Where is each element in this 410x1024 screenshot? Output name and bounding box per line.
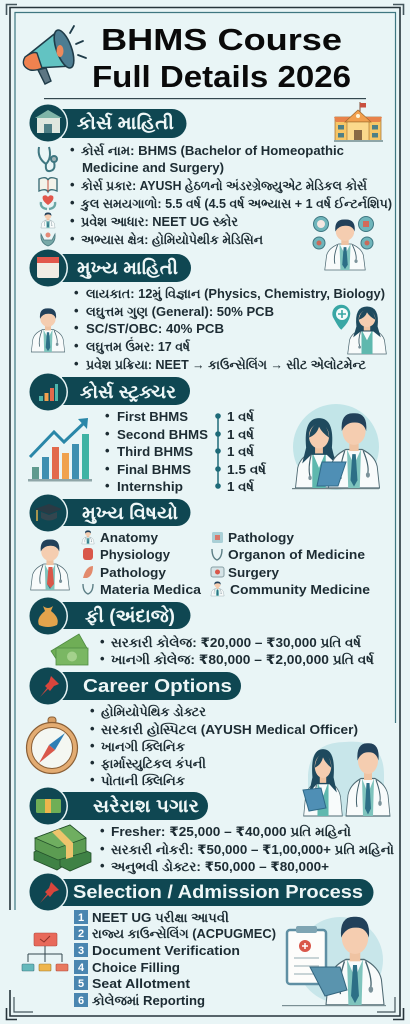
numbered steps: 5	[78, 978, 84, 990]
bullet list: course information: •	[70, 195, 75, 210]
list: course years: •	[105, 478, 110, 493]
bullet list: career options: •	[90, 738, 95, 753]
bullet list: course information: •	[70, 142, 75, 157]
icons: subject column two	[211, 532, 224, 596]
bullet list: career options: હોમિયોપેથિક ડોક્ટર	[101, 703, 206, 719]
list: subjects column two: Organon of Medicine	[228, 547, 365, 562]
list: subjects column two: Community Medicine	[230, 582, 370, 597]
heading: fees	[28, 596, 190, 636]
bullet list: career options: ખાનગી ક્લિનિક	[101, 738, 186, 754]
numbered steps: કોલેજમાં Reporting	[92, 992, 205, 1008]
list: course years: •	[105, 461, 110, 476]
timeline: durations	[215, 408, 267, 494]
heading: admission process: Selection / Admission Process	[73, 882, 363, 902]
bullet list: course information: •	[70, 213, 75, 228]
bullet list: career options	[90, 703, 358, 788]
title	[92, 22, 351, 94]
timeline: durations: 1 વર્ષ	[227, 408, 255, 424]
bullet list: fees: ખાનગી કોલેજ: ₹80,000 – ₹2,00,000 પ્રતિ વર્ષ	[111, 651, 375, 667]
list: subjects column one: Anatomy	[100, 530, 159, 545]
illustration: two doctors	[303, 742, 390, 816]
heading: key information: મુખ્ય માહિતી	[77, 257, 178, 279]
bullet list: salary: સરકારી નોકરી: ₹50,000 – ₹1,00,000+ પ્રતિ મહિનો	[111, 841, 394, 857]
bullet list: key information: •	[74, 338, 79, 353]
bullet list: key information: પ્રવેશ પ્રક્રિયા: NEET → કાઉન્સેલિંગ → સીટ એલોટમેન્ટ	[86, 356, 366, 372]
numbered steps	[74, 909, 276, 1008]
bullet list: key information: •	[74, 356, 79, 371]
section: career options	[26, 666, 390, 816]
title: Full Details 2026	[92, 59, 351, 94]
bullet list: course information: •	[70, 231, 75, 246]
bullet list: career options: પોતાની ક્લિનિક	[101, 772, 186, 788]
list: course years: Final BHMS	[117, 462, 191, 477]
list: course years: •	[105, 426, 110, 441]
bullet list: course information: અભ્યાસ ક્ષેત્ર: હોમિયોપેથીક મેડિસિન	[81, 231, 263, 247]
bullet list: key information: લઘુત્તમ ગુણ (General): 50% PCB	[86, 304, 274, 320]
section: key information	[28, 248, 386, 372]
list: subjects column one: Physiology	[100, 547, 171, 562]
list: course years: •	[105, 408, 110, 423]
bullet list: fees: •	[100, 651, 105, 666]
heading: career options	[28, 666, 241, 706]
list: course years: Second BHMS	[117, 427, 208, 442]
illustration: doctor with medical bubbles	[313, 216, 374, 270]
numbered steps: Document Verification	[92, 943, 240, 958]
numbered steps: 3	[78, 945, 84, 957]
timeline: durations: 1.5 વર્ષ	[227, 461, 267, 477]
bullet list: key information: •	[74, 320, 79, 335]
title: BHMS Course	[101, 22, 342, 57]
bullet list: fees: સરકારી કોલેજ: ₹20,000 – ₹30,000 પ્રતિ વર્ષ	[111, 634, 362, 650]
bullet list: career options: •	[90, 772, 95, 787]
icon: college building	[334, 102, 383, 142]
list: subjects column one: Materia Medica	[100, 582, 202, 597]
section: course information	[28, 102, 392, 270]
section: main subjects	[28, 493, 370, 597]
bullet list: fees	[100, 634, 375, 667]
list: course years: First BHMS	[117, 409, 188, 424]
heading: key information	[28, 248, 191, 288]
heading: main subjects: મુખ્ય વિષયો	[82, 502, 179, 524]
bullet list: career options: ફાર્માસ્યુટિકલ કંપની	[101, 755, 206, 772]
list: course years	[105, 408, 208, 494]
numbered steps: 4	[78, 962, 85, 974]
heading: course information	[28, 103, 186, 143]
list: subjects column two: Surgery	[228, 565, 280, 580]
heading: average salary: સરેરાશ પગાર	[93, 795, 200, 816]
icon: flow chart	[22, 933, 68, 971]
icons: subject column one	[82, 530, 94, 594]
bullet list: key information: •	[74, 285, 79, 300]
icon: megaphone	[23, 26, 86, 84]
numbered steps: Choice Filling	[92, 960, 180, 975]
bullet list: fees: •	[100, 634, 105, 649]
section: course structure	[28, 372, 380, 494]
section: average salary	[28, 786, 394, 875]
list: course years: Third BHMS	[117, 444, 193, 459]
bullet list: course information: કોર્સ પ્રકાર: AYUSH હેઠળનો અંડરગ્રેજ્યુએટ મેડિકલ કોર્સ	[81, 177, 368, 194]
bullet list: key information: SC/ST/OBC: 40% PCB	[86, 321, 224, 336]
list: subjects column two	[228, 530, 370, 597]
chart: growth bars with arrow	[28, 418, 92, 482]
heading: average salary	[28, 786, 208, 826]
numbered steps: 2	[78, 928, 84, 940]
heading: course structure: કોર્સ સ્ટ્રક્ચર	[80, 381, 177, 403]
heading: course structure	[28, 372, 190, 412]
bullet list: course information: કોર્સ નામ: BHMS (Bachelor of Homeopathic	[81, 142, 344, 158]
illustration: male doctor	[31, 308, 65, 352]
bullet list: course information	[70, 142, 392, 247]
bullet list: key information	[74, 285, 385, 372]
icon: compass	[26, 717, 78, 774]
bullet list: career options: •	[90, 755, 95, 770]
illustration: doctor with red tie	[31, 540, 69, 590]
bullet list: course information: પ્રવેશ આધાર: NEET UG સ્કોર	[81, 213, 238, 229]
illustration: two doctors with clipboard	[292, 404, 380, 490]
bullet list: salary: અનુભવી ડોક્ટર: ₹50,000 – ₹80,000+	[111, 858, 329, 875]
bullet list: salary: •	[100, 858, 105, 873]
bullet list: career options: •	[90, 703, 95, 718]
bullet list: salary: Fresher: ₹25,000 – ₹40,000 પ્રતિ મહિનો	[111, 823, 351, 839]
timeline: durations: 1 વર્ષ	[227, 426, 255, 442]
icon: caring hands	[41, 232, 55, 246]
bullet list: salary: •	[100, 841, 105, 856]
timeline: durations: 1 વર્ષ	[227, 478, 255, 494]
bullet list: course information: •	[70, 177, 75, 192]
numbered steps: NEET UG પરીક્ષા આપવી	[92, 909, 229, 925]
list: course years: •	[105, 443, 110, 458]
icon: open book	[39, 178, 57, 192]
heading: career options: Career Options	[83, 676, 232, 696]
list: course years: Internship	[117, 479, 183, 494]
list: subjects column two: Pathology	[228, 530, 295, 545]
bullet list: key information: •	[74, 303, 79, 318]
bullet list: course information: કુલ સમયગાળો: 5.5 વર્ષ (4.5 વર્ષ અભ્યાસ + 1 વર્ષ ઈન્ટર્નશિપ)	[79, 195, 392, 212]
numbered steps: 6	[78, 995, 84, 1007]
bullet list: key information: લાયકાત: 12મું વિજ્ઞાન (Physics, Chemistry, Biology)	[86, 285, 385, 302]
bullet list: career options: •	[90, 721, 95, 736]
bullet list: key information: લઘુત્તમ ઉંમર: 17 વર્ષ	[86, 337, 191, 355]
numbered steps: Seat Allotment	[92, 976, 191, 991]
title rule	[44, 98, 366, 99]
heading: admission process	[28, 872, 374, 912]
heading: main subjects	[28, 493, 190, 533]
timeline: durations: 1 વર્ષ	[227, 443, 255, 459]
illustration: doctor with checklist	[282, 917, 386, 1006]
bullet list: salary: •	[100, 823, 105, 838]
numbered steps: રાજ્ય કાઉન્સેલિંગ (ACPUGMEC)	[92, 925, 276, 941]
icon: heart in hands	[41, 195, 55, 209]
bullet list: career options: સરકારી હોસ્પિટલ (AYUSH Medical Officer)	[101, 721, 358, 737]
list: subjects column one	[100, 530, 202, 597]
numbered steps: 1	[78, 912, 84, 924]
icon: small doctor	[41, 212, 55, 228]
icon: stethoscope	[39, 147, 57, 171]
heading: course information: કોર્સ માહિતી	[77, 112, 174, 133]
icon: stacks of money	[34, 825, 91, 871]
illustration: female doctor with plus bubble	[332, 305, 386, 354]
bullet list: course information: Medicine and Surgery)	[82, 160, 224, 175]
icon: banknotes	[51, 634, 88, 665]
section: admission process	[22, 872, 386, 1008]
bullet list: salary	[100, 823, 394, 875]
heading: fees: ફી (અંદાજે)	[85, 605, 175, 626]
section: fees	[28, 596, 375, 667]
list: subjects column one: Pathology	[100, 565, 167, 580]
